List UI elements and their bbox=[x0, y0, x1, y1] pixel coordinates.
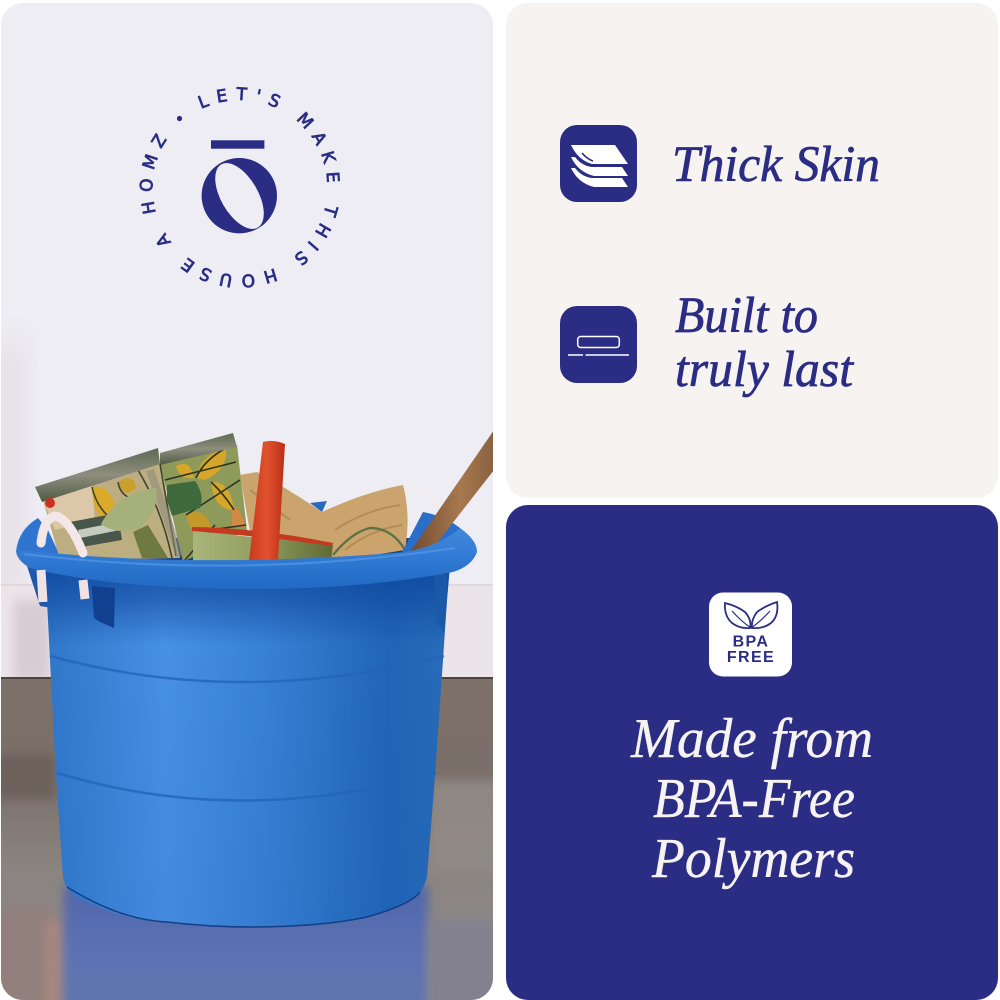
icon: bpa free leaves: FREE bbox=[727, 649, 775, 666]
red lid handle bbox=[249, 441, 285, 561]
logo badge bbox=[139, 86, 340, 288]
tub inner back bbox=[310, 501, 327, 512]
heading: built to truly last: Built to bbox=[675, 288, 818, 344]
tub rim bbox=[16, 528, 477, 589]
icon: bpa free leaves bbox=[709, 592, 792, 676]
floor bbox=[1, 677, 493, 1000]
wall bbox=[1, 3, 493, 603]
tub body bbox=[44, 565, 450, 927]
heading: made from bpa-free polymers: Polymers bbox=[651, 828, 855, 890]
heading: made from bpa-free polymers: Made from bbox=[630, 708, 873, 770]
tub hollow under rim bbox=[27, 566, 48, 608]
panel: product photo bbox=[0, 3, 500, 1000]
green pot bbox=[192, 527, 405, 562]
heading: made from bpa-free polymers bbox=[630, 708, 873, 890]
rope right bbox=[407, 489, 438, 505]
icon: bpa free leaves: BPA bbox=[733, 634, 769, 651]
panel: bpa free bbox=[506, 505, 998, 1000]
wooden handle bbox=[410, 430, 494, 552]
can: front bbox=[35, 448, 180, 560]
heading: built to truly last: truly last bbox=[675, 342, 855, 398]
panel: durability features bbox=[506, 3, 998, 498]
logo mark bbox=[211, 140, 264, 149]
heading: made from bpa-free polymers: BPA-Free bbox=[653, 768, 855, 830]
circular slogan: LET'S MAKE THIS HOUSE A HOMZ bbox=[139, 86, 340, 288]
hat bbox=[240, 472, 408, 560]
watering can bbox=[70, 481, 202, 558]
right inner tub bbox=[402, 512, 460, 552]
rope left bbox=[41, 516, 83, 553]
icon: thickness gauge bbox=[560, 306, 637, 383]
heading: thick skin: Thick Skin bbox=[672, 137, 880, 193]
can: back leaf pattern bbox=[160, 433, 247, 562]
heading: built to truly last bbox=[675, 288, 855, 398]
tub handle notch bbox=[92, 586, 115, 628]
icon: stacked layers bbox=[560, 125, 637, 202]
baseboard bbox=[1, 586, 493, 677]
